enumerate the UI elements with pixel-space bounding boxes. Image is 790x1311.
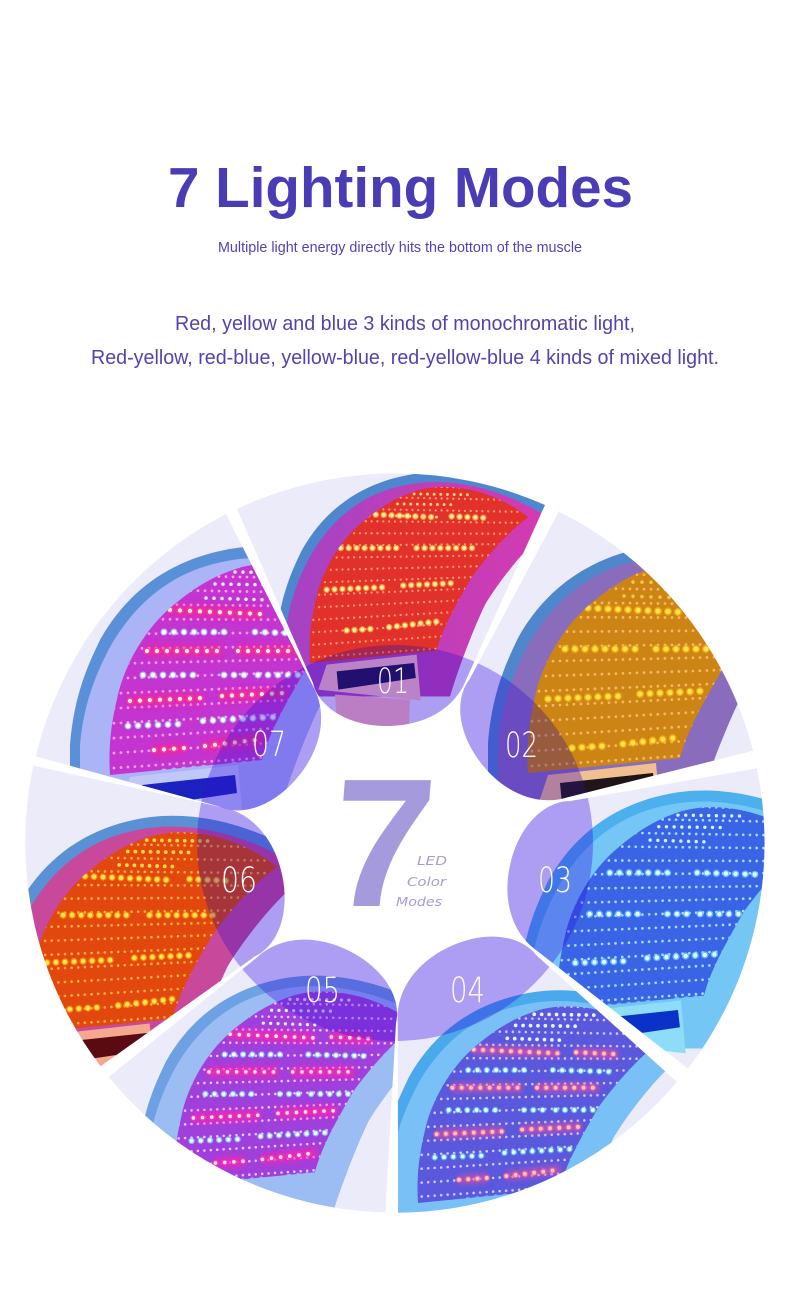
center label: LED Color Modes: Color — [407, 874, 447, 889]
number 04: 04 — [450, 971, 485, 1011]
center numeral 7: 7 — [324, 740, 442, 945]
center label: LED Color Modes: Modes — [396, 894, 443, 909]
number 03: 03 — [538, 861, 572, 901]
subtitle: Multiple light energy directly hits the bottom of the muscle — [218, 240, 582, 256]
number 01: 01 — [377, 662, 409, 702]
number 06: 06 — [221, 861, 257, 901]
center label: LED Color Modes: LED — [417, 853, 447, 868]
center label: LED Color Modes — [396, 853, 447, 909]
panel: mode 04 red-blue mixed light — [398, 936, 677, 1213]
title: 7 Lighting Modes — [168, 156, 633, 220]
panel: mode 07 red-yellow-blue mixed light — [36, 514, 322, 810]
number 07: 07 — [252, 725, 286, 765]
description text — [91, 313, 719, 369]
description text: Red-yellow, red-blue, yellow-blue, red-yellow-blue 4 kinds of mixed light. — [91, 347, 719, 369]
panel: mode 03 blue light — [507, 768, 765, 1068]
panel: mode 01 red light — [237, 474, 545, 726]
panel: mode 02 yellow light — [460, 512, 753, 800]
number 05: 05 — [305, 971, 340, 1011]
number 02: 02 — [505, 726, 538, 766]
panel: mode 06 red-yellow mixed light — [26, 766, 285, 1066]
description text: Red, yellow and blue 3 kinds of monochromatic light, — [175, 313, 635, 335]
panel: mode 05 magenta-blue mixed light — [109, 940, 398, 1212]
